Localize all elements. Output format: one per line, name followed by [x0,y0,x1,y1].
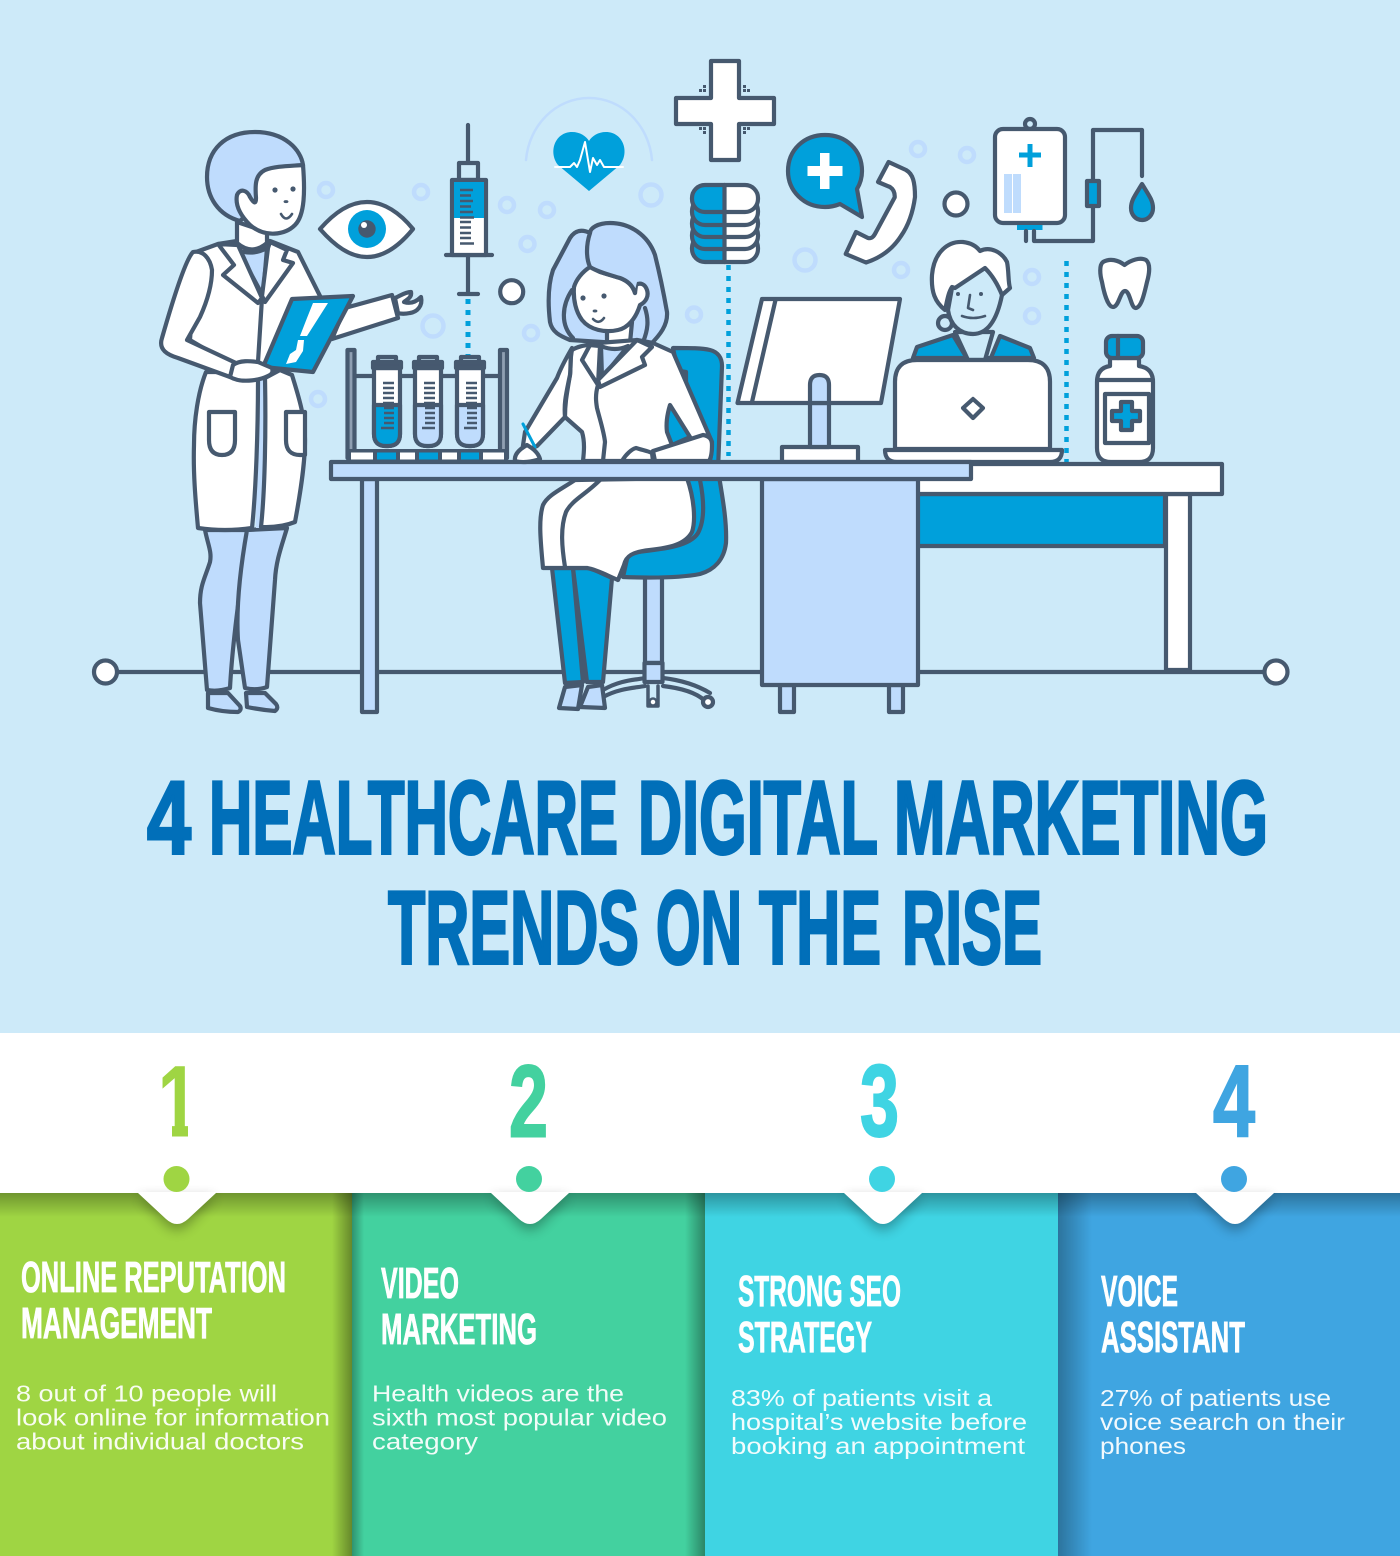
chair [603,348,726,707]
panel 2 body text: category [372,1428,479,1454]
panel 3 heading: STRONG SEO [738,1267,901,1316]
panel 4: voice assistant [1058,1193,1400,1556]
doctor upper coat [190,241,322,375]
chair base [603,577,713,707]
x-ray arm bones [286,303,328,364]
icon: pill stack [692,185,758,262]
panel 2 heading: MARKETING [381,1305,537,1354]
seated doctor upper body [515,223,712,462]
panel 1 body text: look online for information [16,1404,330,1430]
panel 1 heading: MANAGEMENT [21,1299,212,1348]
panel 1 heading: ONLINE REPUTATION [21,1253,286,1302]
seated doctor lower body [540,478,694,709]
receptionist face features [956,292,985,318]
laptop [885,360,1062,462]
icon: speech bubble with plus [788,135,862,217]
test tube 3 [456,357,484,446]
receptionist neck [955,332,993,360]
seated doctor hair inner strands [564,290,647,342]
circle: syringe side [500,280,523,303]
panel 3 body text: hospital’s website before [731,1409,1027,1435]
seated doctor face [574,267,648,331]
coat notch showing chair [667,405,690,445]
illustration: healthcare team [94,61,1288,712]
panel 2: video marketing [352,1193,705,1556]
step 4 number and dot: 4 [1213,1044,1255,1158]
panel 2 body text [372,1380,667,1454]
panel 1: online reputation management [0,1193,352,1556]
seated doctor right arm [653,435,712,461]
x-ray tablet [263,296,353,372]
coat center line [596,385,605,461]
icon: medical cross [676,61,774,160]
seated doctor legs [552,568,612,683]
dotted line under syringe [466,299,470,362]
doctor hair [207,132,303,221]
panel 4 heading: ASSISTANT [1101,1313,1245,1362]
title: TRENDS [388,870,639,986]
seated doctor coat [565,340,712,461]
doctor face features [272,186,296,218]
panel 2 body text: sixth most popular video [372,1404,667,1430]
seated doctor left arm [522,348,572,452]
test tube 2 [414,357,442,446]
seated doctor neck [607,322,632,348]
title: HEALTHCARE [209,760,618,876]
panel 3 body text: booking an appointment [731,1433,1026,1459]
doctor right hand [395,292,421,314]
decorative bubble rings [311,142,1039,406]
doctor standing with x-ray tablet [161,132,421,712]
test tube 1 [373,357,401,446]
background [0,0,1400,1033]
seated doctor hair [549,223,667,345]
test tube rack [347,350,507,462]
panel 3 heading [738,1267,901,1362]
seated doctor fringe [589,235,640,290]
white notches [137,1192,1274,1224]
title: THE [759,870,881,986]
doctor collar and lapels [218,242,293,303]
seated doctor lapels [582,340,652,387]
doctor face [237,165,304,234]
doctor shirt [238,248,267,296]
step 1 number and dot: 1 [158,1044,198,1158]
seated doctor shirt [601,346,628,378]
receptionist earring [938,316,952,330]
step 3 number and dot [860,1044,899,1192]
title: RISE [902,870,1042,986]
title [147,760,1268,986]
panel 3 body text: 83% of patients visit a [731,1385,992,1411]
panel 4 body text [1100,1385,1345,1459]
panel 4 body text: voice search on their [1100,1409,1345,1435]
panel 1 body text: 8 out of 10 people will [16,1380,277,1406]
title: ON [656,870,742,986]
dotted line under pill stack [726,265,731,456]
panel 1 heading [21,1253,286,1348]
icon: syringe [446,125,492,294]
title: DIGITAL [638,760,878,876]
panel 3: strong seo strategy [705,1193,1058,1556]
monitor [738,299,900,462]
panel 3 heading: STRATEGY [738,1313,872,1362]
receptionist face [948,268,1002,334]
seated doctor left hand [515,445,540,462]
circle: beside phone [944,192,968,216]
white number band [0,1033,1400,1193]
doctor right arm [332,295,398,339]
step 1 number and dot [162,1066,190,1192]
panel 2 body text: Health videos are the [372,1380,624,1406]
front table [331,462,971,712]
seated doctor coat lap [540,478,694,580]
icon: tooth [1100,259,1149,308]
seated doctor right hand [622,448,653,461]
seated doctor shoes [559,685,605,709]
doctor legs and feet [200,528,287,712]
dotted line beside laptop [1064,261,1069,463]
step 2 number and dot [509,1044,548,1192]
panel 1 body text [16,1380,330,1454]
pencil [523,424,535,447]
doctor neck [237,222,267,250]
receptionist behind laptop [913,242,1034,360]
floor line with end circles [94,660,1288,684]
white desk with blue drawer and leg [917,464,1222,670]
seated doctor face features [580,293,607,322]
doctor holding hand [230,361,272,381]
panel 4 heading: VOICE [1101,1267,1178,1316]
panel 1 body text: about individual doctors [16,1428,304,1454]
panel 3 body text [731,1385,1027,1459]
icon: IV drip bag [995,119,1153,241]
title: 4 [147,760,191,876]
icon: heart with pulse [526,98,652,191]
panel 4 heading [1101,1267,1245,1362]
step 2 number and dot: 2 [509,1044,548,1158]
chair gap behind arm [667,405,690,445]
panel 2 heading: VIDEO [381,1259,459,1308]
step 4 number and dot [1213,1044,1255,1192]
panel 4 body text: 27% of patients use [1100,1385,1331,1411]
panel 2 heading [381,1259,537,1354]
chair back and seat [623,348,726,578]
panel 4 body text: phones [1100,1433,1186,1459]
icon: medicine bottle [1097,336,1153,462]
gap between coat halves [256,378,266,528]
doctor coat body [194,370,305,530]
icon: eye [320,202,413,257]
receptionist hair [932,242,1010,310]
icon: telephone handset [846,162,915,262]
step 3 number and dot: 3 [860,1044,899,1158]
receptionist shoulders [913,335,1034,360]
doctor left arm [161,252,236,377]
rack base stripes [351,452,504,460]
